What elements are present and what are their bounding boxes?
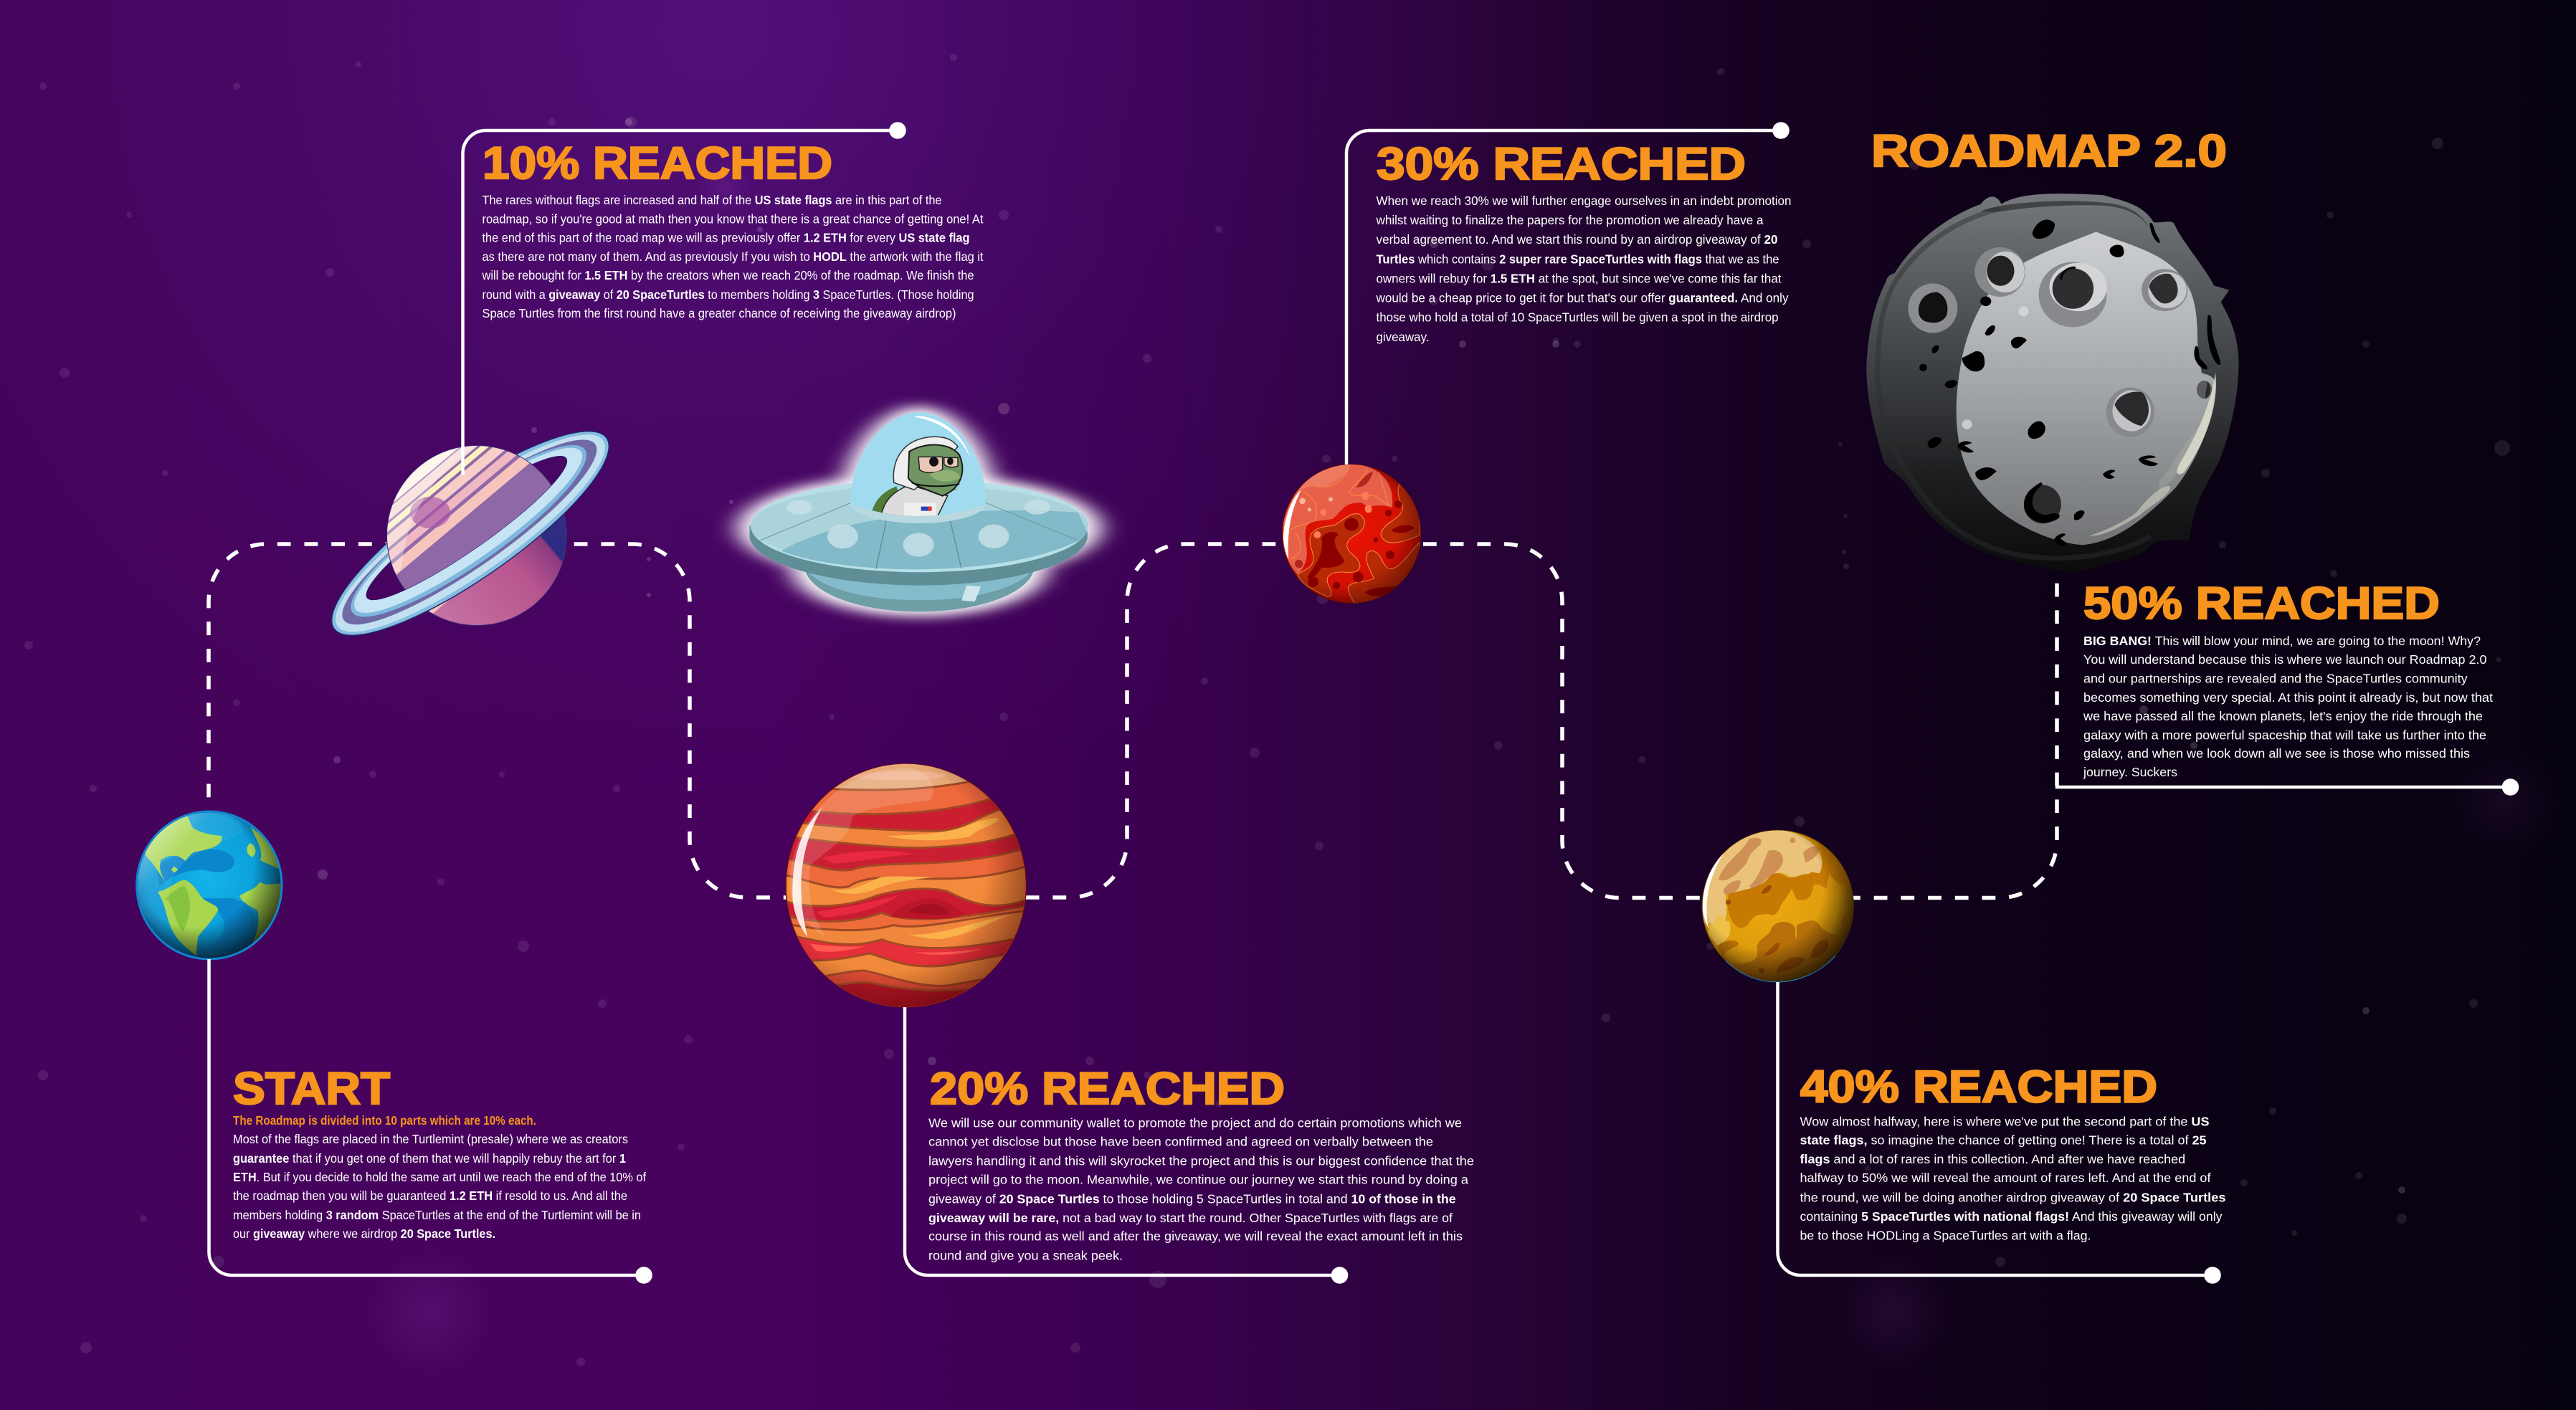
20% text: We will use our community wallet to promote the project and do certain promotions which we	[928, 1116, 1462, 1130]
heading: 30% reached: 30% REACHED	[1377, 139, 1746, 189]
20% text: lawyers handling it and this will skyrocket the project and this is our biggest confidence that the	[928, 1154, 1474, 1168]
30% text: those who hold a total of 10 SpaceTurtles will be given a spot in the airdrop	[1377, 310, 1778, 324]
start text: Most of the flags are placed in the Turtlemint (presale) where we as creators	[233, 1132, 628, 1146]
10% text: roadmap, so if you're good at math then you know that there is a great chance of getting one! At	[482, 212, 984, 227]
40% text: Wow almost halfway, here is where we've put the second part of the US	[1800, 1115, 2210, 1129]
panel: start	[209, 959, 652, 1284]
30% text	[1376, 194, 1791, 344]
50% text: becomes something very special. At this point it already is, but now that	[2083, 690, 2493, 705]
40% text: the round, we will be doing another airdrop giveaway of 20 Space Turtles	[1800, 1191, 2226, 1205]
20% connector	[905, 1007, 1348, 1284]
50% text: we have passed all the known planets, let's enjoy the ride through the	[2083, 709, 2483, 723]
10% connector	[463, 122, 906, 475]
turtle astronaut	[871, 437, 962, 517]
20% text	[928, 1116, 1474, 1263]
ship glow	[738, 406, 1101, 616]
heading: 40% reached: 40% REACHED	[1800, 1062, 2157, 1113]
30% text: whilst waiting to finalize the papers for the promotion we already have a	[1376, 213, 1764, 227]
start text: guarantee that if you get one of them that we will happily rebuy the art for 1	[233, 1151, 626, 1166]
ring front half	[331, 434, 609, 636]
20% text: course in this round as well and after the giveaway, we will reveal the exact amount left in this	[928, 1229, 1463, 1244]
start text: ETH. But if you decide to hold the same art until we reach the end of the 10% of	[233, 1170, 646, 1184]
10% text: Space Turtles from the first round have a greater chance of receiving the giveaway airdrop)	[482, 306, 956, 320]
20% text: giveaway of 20 Space Turtles to those holding 5 SpaceTurtles in total and 10 of those in the	[928, 1192, 1456, 1206]
40% text: state flags, so imagine the chance of getting one! There is a total of 25	[1800, 1133, 2207, 1148]
40% text: flags and a lot of rares in this collection. And after we have reached	[1800, 1152, 2185, 1166]
panel: 50% reached	[2057, 578, 2519, 796]
start text	[233, 1113, 646, 1241]
20% text: project will go to the moon. Meanwhile, we continue our journey we start this round by doing a	[928, 1173, 1468, 1187]
planet: jupiter	[785, 763, 1027, 1008]
spaceship with turtle pilot	[738, 406, 1101, 616]
title: roadmap 2.0: ROADMAP 2.0	[1871, 126, 2227, 176]
heading: 50% reached: 50% REACHED	[2083, 578, 2440, 629]
planet: mars	[1282, 464, 1421, 604]
20% text: giveaway will be rare, not a bad way to start the round. Other SpaceTurtles with flags are of	[928, 1211, 1453, 1225]
10% text: the end of this part of the road map we will as previously offer 1.2 ETH for every US state flag	[482, 231, 969, 245]
saturn body	[386, 445, 567, 626]
10% text	[482, 193, 984, 320]
50% text: and our partnerships are revealed and the SpaceTurtles community	[2083, 671, 2468, 685]
40% connector	[1778, 982, 2221, 1284]
10% text: The rares without flags are increased and half of the US state flags are in this part of the	[482, 193, 942, 207]
glass dome	[850, 412, 986, 517]
panel: 40% reached	[1778, 982, 2226, 1284]
panel: 20% reached	[905, 1007, 1474, 1284]
20% text: round and give you a sneak peek.	[928, 1249, 1123, 1263]
30% text: verbal agreement to. And we start this round by an airdrop giveaway of 20	[1377, 232, 1778, 247]
moon craters	[1908, 219, 2221, 546]
30% text: would be a cheap price to get it for but that's our offer guaranteed. And only	[1376, 291, 1789, 305]
40% text	[1800, 1115, 2226, 1243]
heading: 20% reached: 20% REACHED	[930, 1064, 1285, 1114]
10% text: will be rebought for 1.5 ETH by the creators when we reach 20% of the roadmap. We finish the	[482, 268, 974, 282]
50% text: galaxy with a more powerful spaceship that will take us further into the	[2083, 728, 2486, 743]
30% text: owners will rebuy for 1.5 ETH at the spot, but since we've come this far that	[1377, 271, 1782, 285]
panel: 10% reached	[463, 122, 984, 475]
40% text: containing 5 SpaceTurtles with national flags! And this giveaway will only	[1800, 1209, 2223, 1224]
10% text: round with a giveaway of 20 SpaceTurtles to members holding 3 SpaceTurtles. (Those holding	[482, 287, 974, 302]
40% text: be to those HODLing a SpaceTurtles art with a flag.	[1800, 1229, 2091, 1243]
50% text: galaxy, and when we look down all we see is those who missed this	[2083, 746, 2470, 761]
50% text: BIG BANG! This will blow your mind, we are going to the moon! Why?	[2083, 634, 2481, 648]
20% text: cannot yet disclose but those have been confirmed and agreed on verbally between the	[928, 1135, 1433, 1149]
planet: earth	[136, 811, 287, 959]
start connector	[209, 959, 652, 1284]
start text: our giveaway where we airdrop 20 Space Turtles.	[233, 1226, 495, 1241]
heading: start: START	[233, 1064, 390, 1114]
30% text: When we reach 30% we will further engage ourselves in an indebt promotion	[1377, 194, 1791, 208]
50% text: You will understand because this is where we launch our Roadmap 2.0	[2083, 652, 2487, 667]
dashed journey path	[209, 544, 2057, 897]
50% connector	[2057, 773, 2519, 796]
10% text: as there are not many of them. And as previously If you wish to HODL the artwork with the flag it	[482, 249, 984, 264]
start text: members holding 3 random SpaceTurtles at the end of the Turtlemint will be in	[233, 1208, 641, 1222]
50% text: journey. Suckers	[2083, 765, 2177, 779]
ship hull	[749, 479, 1088, 611]
heading: 10% reached: 10% REACHED	[483, 138, 832, 189]
30% connector	[1346, 122, 1790, 465]
planet: venus	[1701, 829, 1854, 982]
40% text: halfway to 50% we will reveal the amount of rares left. And at the end of	[1800, 1171, 2211, 1185]
moon: roadmap 2.0	[1866, 194, 2238, 572]
start text: The Roadmap is divided into 10 parts which are 10% each.	[233, 1113, 536, 1128]
panel: 30% reached	[1346, 122, 1791, 465]
planet: saturn with ring	[331, 430, 609, 637]
start text: the roadmap then you will be guaranteed 1.2 ETH if resold to us. And all the	[233, 1189, 627, 1203]
30% text: giveaway.	[1377, 330, 1430, 344]
30% text: Turtles which contains 2 super rare SpaceTurtles with flags that we as the	[1377, 252, 1779, 267]
50% text	[2083, 634, 2493, 779]
